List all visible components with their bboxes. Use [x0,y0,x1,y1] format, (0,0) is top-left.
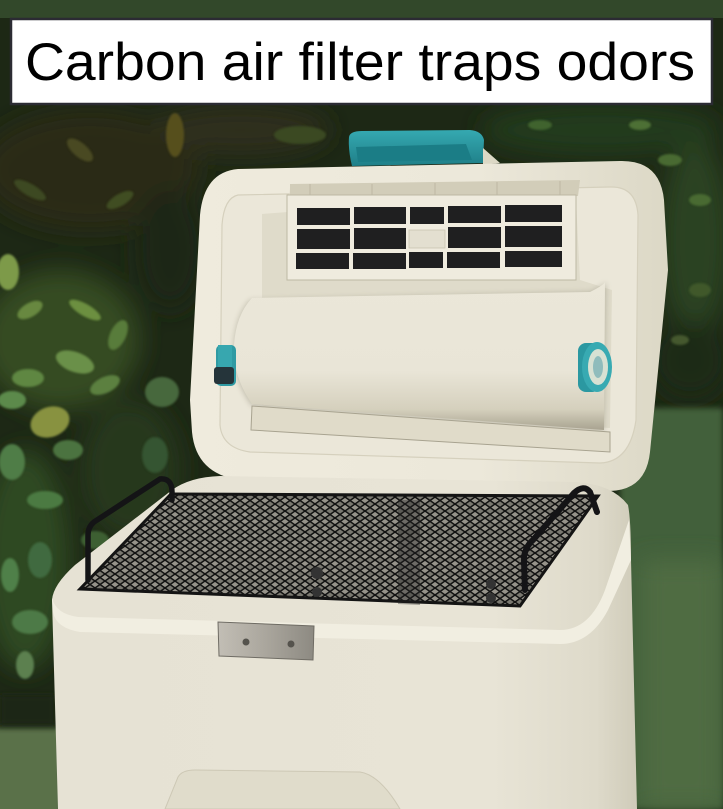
top strip of foliage above title [0,0,723,18]
background: grass right [620,408,723,809]
basket handle left [88,479,172,580]
bin body [52,476,637,809]
title banner: Carbon air filter traps odors [25,33,695,92]
teal spindle right [578,342,612,392]
lid handle: teal [349,130,500,166]
open lid [190,161,668,491]
roll holder [234,282,610,452]
basket handle right [524,488,597,590]
metal latch plate [218,622,314,660]
title banner [11,19,712,104]
wire mesh basket [80,494,598,606]
carbon filter grille [287,180,580,280]
background: grass left [0,695,62,809]
teal spindle left [214,345,236,386]
